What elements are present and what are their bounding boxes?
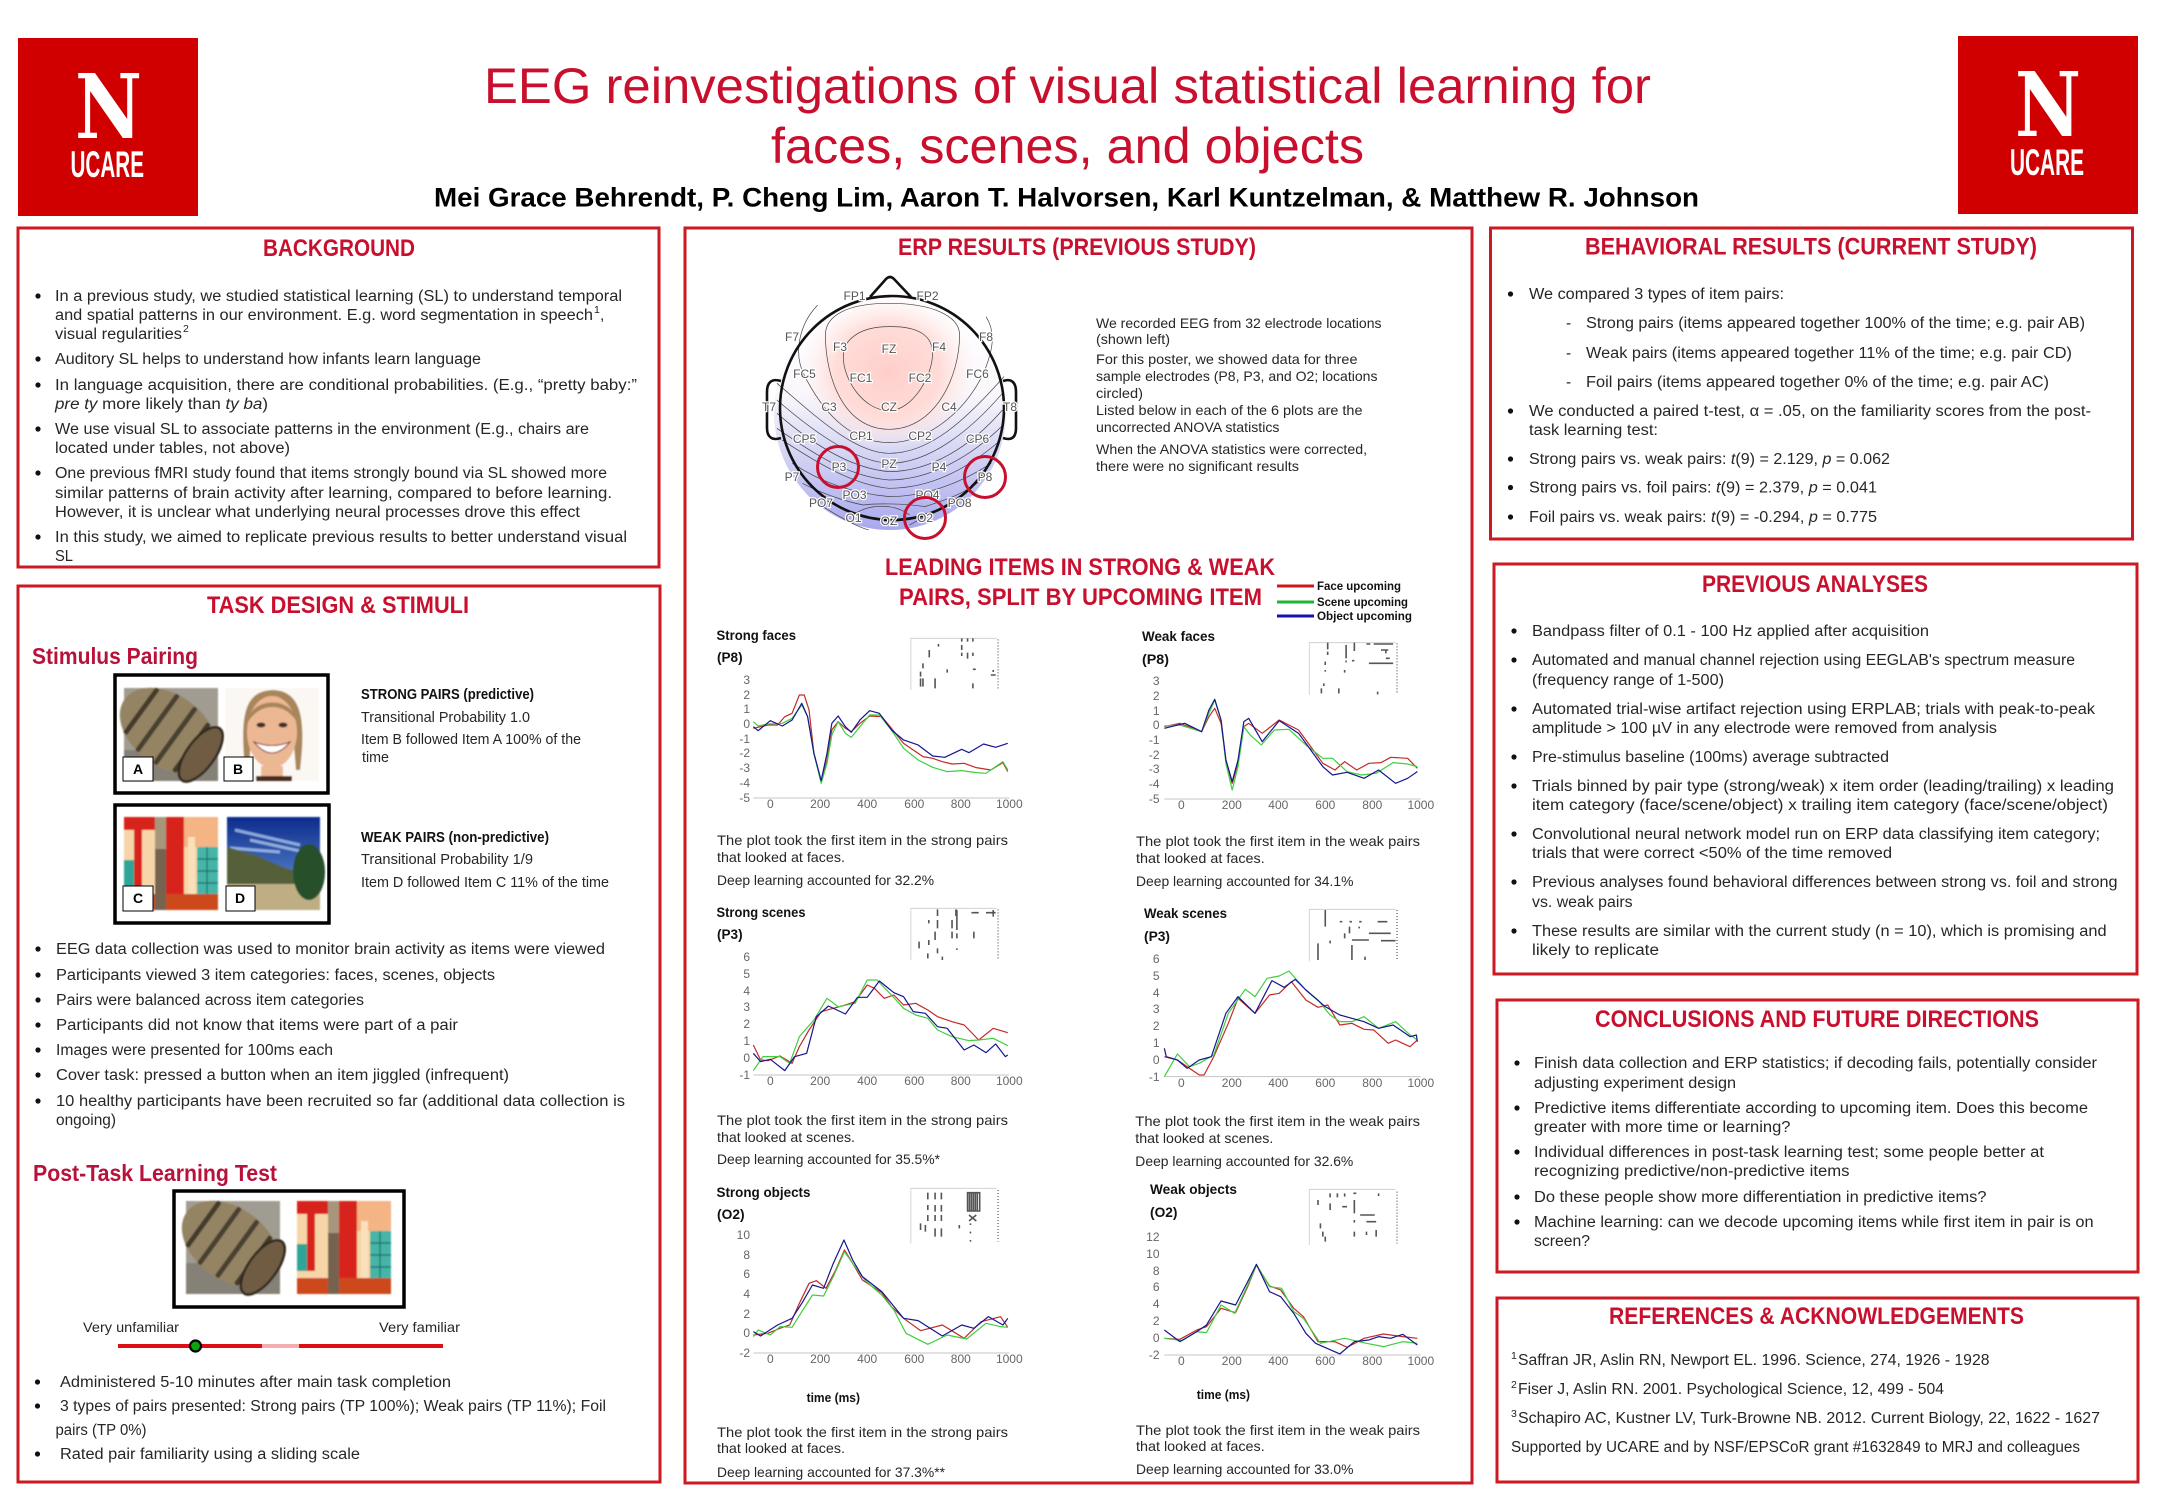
logo: Nebraska UCARE right: UCARE <box>2010 142 2084 183</box>
bullet list: background: similar patterns of brain activity after learning, compared to before learning. <box>55 485 612 502</box>
figure: EEG scalp map with electrodes: O1 <box>845 511 862 525</box>
legend: upcoming item <box>1277 579 1412 623</box>
bullet list: task: ongoing) <box>56 1112 116 1129</box>
figure: EEG scalp map with electrodes: OZ <box>881 514 897 528</box>
chart: strong scenes P3: (P3) <box>717 927 743 942</box>
bullet list: background: In this study, we aimed to replicate previous results to better understand visual <box>55 529 627 546</box>
chart: weak objects O2: 600 <box>1315 1354 1336 1368</box>
reference list: Fiser J, Aslin RN. 2001. Psychological Science, 12, 499 - 504 <box>1518 1381 1944 1398</box>
text: EEG description: When the ANOVA statistics were corrected, <box>1096 441 1367 457</box>
chart: strong scenes P3: 5 <box>743 967 750 981</box>
text: EEG description: there were no significant results <box>1096 458 1299 474</box>
bullet list: conclusions: Machine learning: can we decode upcoming items while first item in pair is on <box>1534 1214 2094 1231</box>
bullet list: previous analyses: Bandpass filter of 0.1 - 100 Hz applied after acquisition <box>1532 623 1929 640</box>
figure: weak pair images: C <box>133 890 143 906</box>
figure: EEG scalp map with electrodes: PZ <box>881 457 897 471</box>
figure: EEG scalp map with electrodes: CP5 <box>793 432 816 446</box>
text: EEG description: For this poster, we showed data for three <box>1096 351 1358 367</box>
heading: task design: TASK DESIGN & STIMULI <box>207 592 469 619</box>
bullet list: background: pre ty more likely than ty ba) <box>54 396 268 413</box>
chart: strong scenes P3: 0 <box>767 1074 774 1088</box>
chart: strong faces P8: -5 <box>739 791 750 805</box>
figure: EEG scalp map with electrodes: C4 <box>941 400 957 414</box>
chart: strong faces P8: -2 <box>739 746 750 760</box>
bullet list: behavioral results: - <box>1566 345 1571 362</box>
chart: weak scenes P3: that looked at scenes. <box>1135 1130 1273 1146</box>
chart: weak faces P8: 0 <box>1178 798 1185 812</box>
bullet list: previous analyses: amplitude > 100 µV in any electrode were removed from analysis <box>1532 720 1997 737</box>
chart: weak objects O2: that looked at faces. <box>1136 1438 1265 1454</box>
chart: strong objects O2: Deep learning accounted for 37.3%** <box>717 1464 946 1480</box>
chart: strong objects O2: 0 <box>743 1326 750 1340</box>
bullet list: previous analyses: item category (face/scene/object) x trailing item category (face/scene/object) <box>1532 797 2108 814</box>
figure: weak pair images <box>115 805 329 923</box>
heading: ERP results: ERP RESULTS (PREVIOUS STUDY) <box>898 234 1256 261</box>
chart: strong scenes P3: 3 <box>743 1000 750 1014</box>
text: strong pairs: STRONG PAIRS (predictive) <box>361 687 534 703</box>
chart: weak faces P8: The plot took the first item in the weak pairs <box>1136 833 1420 849</box>
bullet list: conclusions: recognizing predictive/non-predictive items <box>1534 1163 1850 1180</box>
legend: upcoming item: Face upcoming <box>1317 579 1401 593</box>
figure: EEG scalp map with electrodes: PO8 <box>948 496 972 510</box>
chart: weak faces P8: 2 <box>1153 689 1160 703</box>
bullet list: previous analyses: likely to replicate <box>1532 942 1659 959</box>
chart: weak objects O2: Weak objects <box>1150 1182 1237 1197</box>
bullet list: behavioral results <box>1508 286 2091 526</box>
figure: EEG scalp map with electrodes: PO7 <box>809 496 833 510</box>
chart: strong scenes P3: 400 <box>857 1074 878 1088</box>
heading: previous analyses: PREVIOUS ANALYSES <box>1702 571 1928 598</box>
chart: weak objects O2: (O2) <box>1150 1205 1178 1220</box>
bullet list: post-task test: pairs (TP 0%) <box>56 1422 146 1439</box>
text: weak pairs: WEAK PAIRS (non-predictive) <box>361 830 549 846</box>
chart: weak faces P8: -4 <box>1149 777 1160 791</box>
figure: post-task test images <box>166 1183 404 1307</box>
chart: weak faces P8: 200 <box>1222 798 1242 812</box>
chart: strong objects O2: 4 <box>743 1287 750 1301</box>
chart: weak scenes P3: 800 <box>1362 1076 1383 1090</box>
reference list: Saffran JR, Aslin RN, Newport EL. 1996. Science, 274, 1926 - 1928 <box>1518 1352 1990 1369</box>
panel: task design and stimuli <box>18 586 660 1482</box>
bullet list: background: , <box>600 307 604 324</box>
text: EEG description: sample electrodes (P8, P3, and O2; locations <box>1096 368 1378 384</box>
chart: weak scenes P3 <box>1135 906 1434 1169</box>
figure: EEG scalp map with electrodes: FP1 <box>843 289 866 303</box>
chart: weak objects O2: 4 <box>1153 1297 1160 1311</box>
figure: EEG scalp map with electrodes: CZ <box>881 400 897 414</box>
reference list: Supported by UCARE and by NSF/EPSCoR grant #1632849 to MRJ and colleagues <box>1511 1439 2080 1456</box>
chart: strong scenes P3: 0 <box>743 1051 750 1065</box>
text: strong pairs: Item B followed Item A 100% of the <box>361 732 581 748</box>
bullet list: background: Auditory SL helps to understand how infants learn language <box>55 351 481 368</box>
chart: strong faces P8: 1000 <box>996 797 1023 811</box>
reference list <box>1511 1350 2100 1456</box>
bullet list: background: However, it is unclear what underlying neural processes drove this effect <box>55 504 581 521</box>
chart: weak objects O2: 0 <box>1153 1331 1160 1345</box>
panel: ERP results <box>685 228 1472 1483</box>
logo: Nebraska UCARE right <box>1958 36 2138 214</box>
title: EEG reinvestigations of visual statistical learning for <box>484 58 1651 114</box>
figure: EEG scalp map with electrodes <box>762 277 1017 538</box>
chart: strong faces P8 <box>716 628 1023 888</box>
chart: weak scenes P3: 1 <box>1153 1036 1160 1050</box>
panel: background <box>18 228 659 567</box>
chart: weak faces P8: Deep learning accounted for 34.1% <box>1136 873 1353 889</box>
heading: leading items <box>885 554 1276 611</box>
figure: EEG scalp map with electrodes: O2 <box>917 511 933 525</box>
chart: strong objects O2: 400 <box>857 1352 878 1366</box>
legend: upcoming item: Object upcoming <box>1317 609 1412 623</box>
chart: weak scenes P3: -1 <box>1149 1070 1160 1084</box>
text: weak pairs <box>361 830 609 891</box>
chart: strong scenes P3: 2 <box>743 1017 750 1031</box>
text: EEG description <box>1096 315 1382 474</box>
chart: strong objects O2: The plot took the first item in the strong pairs <box>717 1424 1008 1440</box>
slider: familiarity scale: Very familiar <box>379 1319 460 1335</box>
chart: weak faces P8 <box>1136 629 1434 889</box>
chart: weak objects O2: The plot took the first item in the weak pairs <box>1136 1422 1420 1438</box>
chart: strong scenes P3: 600 <box>904 1074 925 1088</box>
figure: EEG scalp map with electrodes: P4 <box>932 460 947 474</box>
chart: strong faces P8: 0 <box>743 717 750 731</box>
bullet list: background: 1 <box>594 304 600 316</box>
panel: behavioral results <box>1490 228 2132 539</box>
chart: weak faces P8: -5 <box>1149 792 1160 806</box>
chart: weak faces P8: 800 <box>1362 798 1383 812</box>
bullet list: previous analyses: These results are similar with the current study (n = 10), which is promising and <box>1532 923 2107 940</box>
chart: strong objects O2 <box>716 1185 1023 1480</box>
chart: strong objects O2: 1000 <box>996 1352 1023 1366</box>
bullet list: previous analyses <box>1511 623 2118 959</box>
chart: weak faces P8: 1000 <box>1407 798 1434 812</box>
chart: weak scenes P3: 400 <box>1268 1076 1289 1090</box>
chart: weak objects O2: 200 <box>1222 1354 1242 1368</box>
chart: weak faces P8: 3 <box>1153 674 1160 688</box>
slider: familiarity scale <box>83 1319 460 1352</box>
chart: weak objects O2: -2 <box>1149 1348 1160 1362</box>
bullet list: behavioral results: Foil pairs (items appeared together 0% of the time; e.g. pair AC) <box>1586 374 2049 391</box>
chart: weak scenes P3: (P3) <box>1144 929 1170 944</box>
chart: weak scenes P3: 5 <box>1153 969 1160 983</box>
figure: EEG scalp map with electrodes: F7 <box>785 330 799 344</box>
bullet list: previous analyses: Automated trial-wise artifact rejection using ERPLAB; trials with peak-to-peak <box>1532 701 2095 718</box>
chart: weak scenes P3: The plot took the first item in the weak pairs <box>1135 1113 1420 1129</box>
bullet list: background: SL <box>55 548 73 565</box>
chart: weak objects O2: 6 <box>1153 1280 1160 1294</box>
chart: weak objects O2: 0 <box>1178 1354 1185 1368</box>
chart: strong faces P8: 400 <box>857 797 878 811</box>
reference list: 1 <box>1511 1350 1517 1362</box>
bullet list: behavioral results: Strong pairs vs. foil pairs: t(9) = 2.379, p = 0.041 <box>1529 480 1877 496</box>
chart: weak faces P8: Weak faces <box>1142 629 1215 644</box>
bullet list: post-task test: Administered 5-10 minutes after main task completion <box>60 1374 451 1391</box>
chart: weak faces P8: 600 <box>1315 798 1336 812</box>
chart: strong faces P8: (P8) <box>717 650 743 665</box>
bullet list: conclusions: adjusting experiment design <box>1534 1075 1736 1092</box>
subheading: post-task learning test: Post-Task Learning Test <box>33 1160 277 1186</box>
bullet list: behavioral results: We conducted a paired t-test, α = .05, on the familiarity scores from the post- <box>1529 403 2091 420</box>
chart: strong scenes P3: 6 <box>743 950 750 964</box>
bullet list: task: EEG data collection was used to monitor brain activity as items were viewed <box>56 941 605 958</box>
figure: EEG scalp map with electrodes: PO4 <box>915 488 940 502</box>
chart: weak scenes P3: 200 <box>1222 1076 1242 1090</box>
chart: strong faces P8: 1 <box>743 702 750 716</box>
bullet list: background: In a previous study, we studied statistical learning (SL) to understand temporal <box>55 288 622 305</box>
chart: weak faces P8: 400 <box>1268 798 1289 812</box>
chart: strong objects O2: 6 <box>743 1267 750 1281</box>
heading: leading items: LEADING ITEMS IN STRONG & WEAK <box>885 554 1276 581</box>
bullet list: previous analyses: vs. weak pairs <box>1532 894 1633 911</box>
chart: weak scenes P3: 4 <box>1153 986 1160 1000</box>
chart: strong faces P8: 200 <box>810 797 831 811</box>
text: weak pairs: Item D followed Item C 11% of the time <box>361 875 609 891</box>
chart: strong scenes P3 <box>716 905 1023 1167</box>
bullet list: post-task test: 3 types of pairs presented: Strong pairs (TP 100%); Weak pairs (TP 11%); Foil <box>60 1398 606 1415</box>
figure: EEG scalp map with electrodes: CP6 <box>966 432 989 446</box>
text: EEG description: We recorded EEG from 32 electrode locations <box>1096 315 1382 331</box>
bullet list: background: and spatial patterns in our environment. E.g. word segmentation in speech <box>55 307 593 324</box>
chart: strong objects O2: 200 <box>810 1352 831 1366</box>
legend: upcoming item: Scene upcoming <box>1317 595 1408 609</box>
bullet list: conclusions: Finish data collection and ERP statistics; if decoding fails, potentially consider <box>1534 1055 2097 1072</box>
heading: leading items: PAIRS, SPLIT BY UPCOMING ITEM <box>899 584 1262 611</box>
chart: weak faces P8: -3 <box>1149 762 1160 776</box>
chart: strong scenes P3: 800 <box>951 1074 971 1088</box>
chart: weak objects O2: 1000 <box>1407 1354 1434 1368</box>
heading: references: REFERENCES & ACKNOWLEDGEMENTS <box>1609 1303 2024 1330</box>
chart: strong faces P8: -3 <box>739 761 750 775</box>
chart: strong objects O2: -2 <box>739 1346 750 1360</box>
chart: strong scenes P3: 1000 <box>996 1074 1023 1088</box>
chart: strong faces P8: Strong faces <box>716 628 796 643</box>
chart: weak objects O2: time (ms) <box>1197 1388 1250 1402</box>
authors: Mei Grace Behrendt, P. Cheng Lim, Aaron T. Halvorsen, Karl Kuntzelman, & Matthew R. Johnson <box>434 182 1699 212</box>
logo: Nebraska UCARE left <box>18 38 198 216</box>
chart: weak objects O2: 2 <box>1153 1314 1160 1328</box>
chart: strong faces P8: -4 <box>739 776 750 790</box>
figure: EEG scalp map with electrodes: F3 <box>833 340 847 354</box>
bullet list: behavioral results: Strong pairs vs. weak pairs: t(9) = 2.129, p = 0.062 <box>1529 451 1890 468</box>
bullet list: background: 2 <box>183 323 189 335</box>
title <box>484 58 1651 174</box>
chart: strong faces P8: Deep learning accounted for 32.2% <box>717 872 934 888</box>
bullet list: behavioral results: - <box>1566 374 1571 391</box>
bullet list: behavioral results: Strong pairs (items appeared together 100% of the time; e.g. pair AB) <box>1586 315 2085 332</box>
figure: EEG scalp map with electrodes: FP2 <box>916 289 939 303</box>
chart: weak objects O2: 800 <box>1362 1354 1383 1368</box>
bullet list: background <box>35 288 637 565</box>
bullet list: behavioral results: Weak pairs (items appeared together 11% of the time; e.g. pair CD) <box>1586 345 2072 362</box>
bullet list: previous analyses: Trials binned by pair type (strong/weak) x item order (leading/trailing) x leading <box>1532 778 2114 795</box>
chart: strong faces P8: 800 <box>951 797 971 811</box>
chart: strong objects O2: 800 <box>951 1352 971 1366</box>
text: EEG description: Listed below in each of the 6 plots are the <box>1096 402 1363 418</box>
chart: strong scenes P3: 1 <box>743 1034 750 1048</box>
panel: conclusions and future directions <box>1497 1000 2138 1272</box>
text: strong pairs: Transitional Probability 1.0 <box>361 710 530 726</box>
figure: EEG scalp map with electrodes: CP2 <box>908 429 932 443</box>
chart: strong objects O2: 10 <box>737 1228 750 1242</box>
figure: EEG scalp map with electrodes: F4 <box>932 340 946 354</box>
chart: strong scenes P3: -1 <box>739 1068 750 1082</box>
chart: weak scenes P3: 0 <box>1178 1076 1185 1090</box>
bullet list: background: We use visual SL to associate patterns in the environment (E.g., chairs are <box>55 421 589 438</box>
slider: familiarity scale: Very unfamiliar <box>83 1319 179 1335</box>
bullet list: task: Participants did not know that items were part of a pair <box>56 1017 458 1034</box>
chart: weak faces P8: -2 <box>1149 748 1160 762</box>
bullet list: post-task test <box>35 1374 606 1463</box>
chart: weak faces P8: -1 <box>1149 733 1160 747</box>
logo: Nebraska UCARE left: N <box>75 54 142 159</box>
heading: background: BACKGROUND <box>263 235 415 262</box>
bullet list: previous analyses: Pre-stimulus baseline (100ms) average subtracted <box>1532 749 1889 766</box>
chart: weak objects O2: 10 <box>1146 1247 1160 1261</box>
chart: weak scenes P3: 2 <box>1153 1019 1160 1033</box>
chart: strong objects O2: 8 <box>743 1248 750 1262</box>
chart: strong objects O2: Strong objects <box>716 1185 810 1200</box>
bullet list: background: located under tables, not above) <box>55 440 290 457</box>
bullet list: task: Pairs were balanced across item categories <box>56 992 364 1009</box>
chart: strong objects O2: that looked at faces. <box>717 1440 845 1456</box>
figure: weak pair images: D <box>235 890 245 906</box>
figure: EEG scalp map with electrodes: CP1 <box>849 429 873 443</box>
chart: weak faces P8: 0 <box>1153 718 1160 732</box>
panel: references and acknowledgements <box>1497 1298 2138 1482</box>
text: EEG description: circled) <box>1096 385 1143 401</box>
bullet list: task: Cover task: pressed a button when an item jiggled (infrequent) <box>56 1067 509 1084</box>
bullet list: background: One previous fMRI study found that items strongly bound via SL showed more <box>55 465 607 482</box>
chart: weak scenes P3: 1000 <box>1407 1076 1434 1090</box>
bullet list: behavioral results: Foil pairs vs. weak pairs: t(9) = -0.294, p = 0.775 <box>1529 509 1877 526</box>
figure: EEG scalp map with electrodes: FC6 <box>966 367 989 381</box>
chart: strong faces P8: -1 <box>739 732 750 746</box>
subheading: stimulus pairing: Stimulus Pairing <box>32 643 198 669</box>
chart: strong faces P8: 0 <box>767 797 774 811</box>
chart: strong faces P8: 600 <box>904 797 925 811</box>
text: EEG description: uncorrected ANOVA statistics <box>1096 419 1280 435</box>
reference list: Schapiro AC, Kustner LV, Turk-Browne NB. 2012. Current Biology, 22, 1622 - 1627 <box>1518 1410 2100 1427</box>
text: weak pairs: Transitional Probability 1/9 <box>361 852 533 868</box>
figure: strong pair images: B <box>233 761 243 777</box>
figure: EEG scalp map with electrodes: F8 <box>979 330 993 344</box>
chart: strong objects O2: 2 <box>743 1307 750 1321</box>
bullet list: task: Images were presented for 100ms each <box>56 1042 333 1059</box>
chart: strong objects O2: (O2) <box>717 1207 745 1222</box>
bullet list: conclusions: greater with more time or learning? <box>1534 1119 1791 1136</box>
figure: EEG scalp map with electrodes: C3 <box>821 400 837 414</box>
chart: weak objects O2: 8 <box>1153 1264 1160 1278</box>
figure: EEG scalp map with electrodes: P7 <box>785 470 800 484</box>
chart: weak scenes P3: 3 <box>1153 1002 1160 1016</box>
reference list: 2 <box>1511 1379 1517 1391</box>
chart: weak scenes P3: 0 <box>1153 1053 1160 1067</box>
chart: strong objects O2: 600 <box>904 1352 925 1366</box>
figure: strong pair images <box>104 670 328 793</box>
chart: strong scenes P3: Strong scenes <box>716 905 806 920</box>
chart: strong faces P8: that looked at faces. <box>717 849 845 865</box>
figure: EEG scalp map with electrodes: FC1 <box>850 371 873 385</box>
figure: EEG scalp map with electrodes: FC2 <box>909 371 932 385</box>
reference list: 3 <box>1511 1408 1517 1420</box>
bullet list: previous analyses: Automated and manual channel rejection using EEGLAB's spectrum measure <box>1532 652 2075 669</box>
bullet list: conclusions: Do these people show more differentiation in predictive items? <box>1534 1189 1987 1206</box>
chart: strong scenes P3: Deep learning accounted for 35.5%* <box>717 1151 941 1167</box>
chart: strong scenes P3: 4 <box>743 984 750 998</box>
bullet list: task: Participants viewed 3 item categories: faces, scenes, objects <box>56 967 495 984</box>
bullet list: behavioral results: We compared 3 types of item pairs: <box>1529 286 1784 303</box>
chart: weak objects O2: 12 <box>1146 1230 1160 1244</box>
chart: strong objects O2: 0 <box>767 1352 774 1366</box>
chart: weak faces P8: that looked at faces. <box>1136 850 1265 866</box>
heading: behavioral results: BEHAVIORAL RESULTS (CURRENT STUDY) <box>1585 234 2037 260</box>
bullet list: conclusions: Individual differences in post-task learning test; some people better at <box>1534 1144 2045 1161</box>
bullet list: behavioral results: task learning test: <box>1529 422 1658 439</box>
chart: weak objects O2: Deep learning accounted for 33.0% <box>1136 1461 1353 1477</box>
chart: strong scenes P3: 200 <box>810 1074 831 1088</box>
figure: EEG scalp map with electrodes: T7 <box>762 400 776 414</box>
bullet list: task: 10 healthy participants have been recruited so far (additional data collection is <box>56 1093 625 1110</box>
chart: weak scenes P3: Deep learning accounted for 32.6% <box>1135 1153 1353 1169</box>
panel: previous analyses <box>1494 564 2137 974</box>
logo: Nebraska UCARE left: UCARE <box>70 144 144 185</box>
bullet list: previous analyses: Previous analyses found behavioral differences between strong vs. foil and strong <box>1532 874 2118 891</box>
figure: EEG scalp map with electrodes: P3 <box>832 460 847 474</box>
chart: weak objects O2 <box>1136 1182 1434 1477</box>
bullet list: conclusions <box>1514 1055 2097 1250</box>
bullet list: post-task test: Rated pair familiarity using a sliding scale <box>60 1446 360 1463</box>
bullet list: background: In language acquisition, there are conditional probabilities. (E.g., “pretty baby:” <box>55 377 637 394</box>
chart: strong faces P8: The plot took the first item in the strong pairs <box>717 832 1008 848</box>
text: strong pairs: time <box>362 750 389 766</box>
chart: weak scenes P3: Weak scenes <box>1144 906 1227 921</box>
bullet list: previous analyses: (frequency range of 1-500) <box>1532 672 1724 689</box>
figure: EEG scalp map with electrodes: PO3 <box>842 488 867 502</box>
bullet list: background: visual regularities <box>55 326 182 343</box>
chart: strong faces P8: 3 <box>743 673 750 687</box>
title: faces, scenes, and objects <box>771 118 1364 174</box>
figure: strong pair images: A <box>133 761 143 777</box>
chart: weak faces P8: (P8) <box>1142 652 1169 667</box>
logo: Nebraska UCARE right: N <box>2015 52 2081 157</box>
figure: EEG scalp map with electrodes: P8 <box>978 470 993 484</box>
chart: strong objects O2: time (ms) <box>807 1391 860 1405</box>
chart: strong scenes P3: The plot took the first item in the strong pairs <box>717 1112 1008 1128</box>
bullet list: behavioral results: - <box>1566 315 1571 332</box>
text: EEG description: (shown left) <box>1096 331 1170 347</box>
bullet list: previous analyses: Convolutional neural network model run on ERP data classifying item category; <box>1532 826 2100 843</box>
bullet list: conclusions: Predictive items differentiate according to upcoming item. Does this become <box>1534 1100 2088 1117</box>
bullet list: conclusions: screen? <box>1534 1233 1590 1250</box>
figure: EEG scalp map with electrodes: FZ <box>882 342 896 356</box>
bullet list: previous analyses: trials that were correct <50% of the time removed <box>1532 845 1892 862</box>
chart: strong scenes P3: that looked at scenes. <box>717 1129 855 1145</box>
heading: conclusions: CONCLUSIONS AND FUTURE DIRECTIONS <box>1595 1006 2039 1033</box>
text: strong pairs <box>361 687 581 766</box>
chart: weak objects O2: 400 <box>1268 1354 1289 1368</box>
chart: weak scenes P3: 600 <box>1315 1076 1336 1090</box>
chart: weak faces P8: 1 <box>1153 704 1160 718</box>
bullet list: task <box>35 941 625 1129</box>
figure: EEG scalp map with electrodes: FC5 <box>793 367 816 381</box>
chart: strong faces P8: 2 <box>743 688 750 702</box>
chart: weak scenes P3: 6 <box>1153 952 1160 966</box>
figure: EEG scalp map with electrodes: T8 <box>1003 400 1017 414</box>
